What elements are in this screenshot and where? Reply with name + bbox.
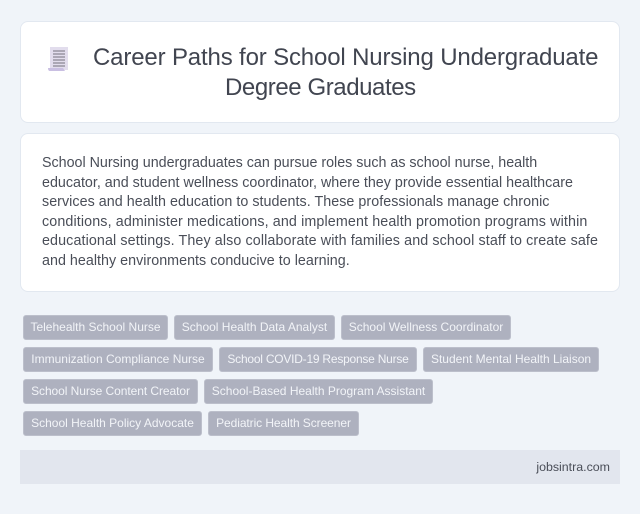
panel: title card (20, 21, 620, 123)
description text: and healthy environments conducive to learning. (42, 253, 350, 269)
tag: Immunization Compliance Nurse (31, 352, 205, 366)
tag: Student Mental Health Liaison (431, 352, 591, 366)
footer (20, 450, 620, 484)
description text: School Nursing undergraduates can pursue roles such as school nurse, health (42, 155, 537, 171)
description text: conditions, administer medications, and implement health promotion programs within (42, 214, 587, 230)
description text (42, 155, 598, 269)
icon: document (48, 47, 68, 71)
tag (23, 347, 213, 372)
tag (341, 315, 511, 340)
tag: Telehealth School Nurse (30, 320, 161, 334)
title: Career Paths for School Nursing Undergraduate (93, 44, 598, 71)
footer: jobsintra.com (536, 460, 610, 474)
tag: School Health Policy Advocate (31, 416, 194, 430)
career path tags (23, 315, 599, 436)
tag (174, 315, 335, 340)
panel: description card (20, 133, 620, 292)
tag: School COVID-19 Response Nurse (227, 352, 409, 366)
description text: educator, and student wellness coordinator, where they provide essential healthcare (42, 175, 573, 191)
tag (219, 347, 417, 372)
tag (23, 379, 198, 404)
title (93, 44, 598, 101)
tag (23, 411, 202, 436)
tag: Pediatric Health Screener (216, 416, 351, 430)
tag: School Wellness Coordinator (349, 320, 503, 334)
tag (23, 315, 168, 340)
tag: School-Based Health Program Assistant (212, 384, 425, 398)
description text: educational settings. They also collaborate with families and school staff to create safe (42, 233, 598, 249)
tag (423, 347, 599, 372)
tag: School Nurse Content Creator (31, 384, 190, 398)
title: Degree Graduates (225, 74, 416, 101)
tag: School Health Data Analyst (182, 320, 327, 334)
tag (208, 411, 359, 436)
description text: services and health education to students. These professionals manage chronic (42, 194, 550, 210)
tag (204, 379, 433, 404)
